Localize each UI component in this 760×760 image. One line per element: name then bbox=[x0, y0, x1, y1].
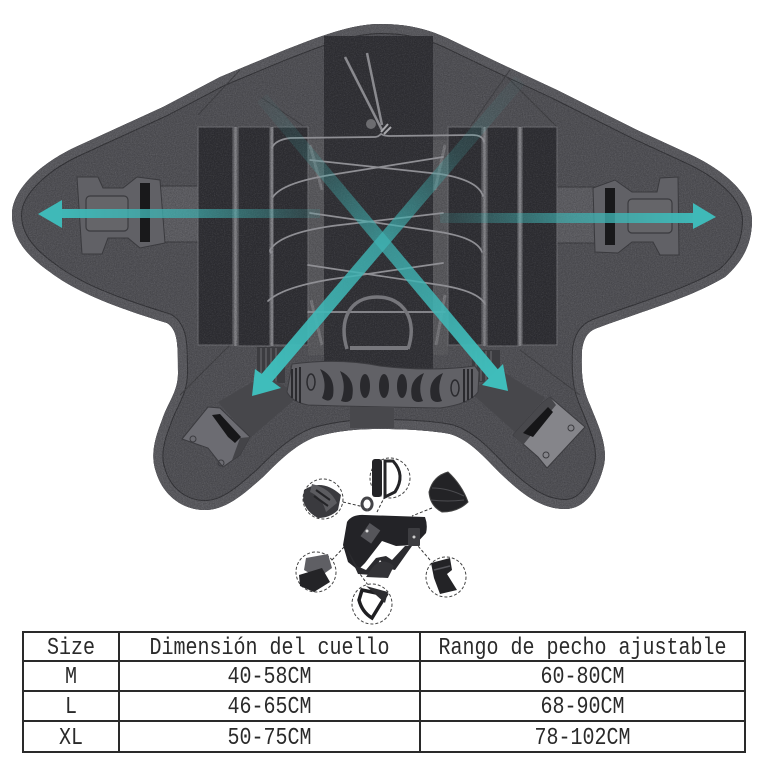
size table: Rango de pecho ajustable bbox=[438, 634, 727, 662]
inner lacing side strips bbox=[308, 140, 448, 355]
size table: 50-75CM bbox=[227, 724, 312, 752]
cord lock and loose cord ends bbox=[345, 53, 391, 134]
harness product photo bbox=[0, 0, 760, 520]
size table: 78-102CM bbox=[534, 724, 630, 752]
leader lines bbox=[332, 496, 432, 585]
D-ring bbox=[344, 297, 411, 349]
horizontal arrow to left bbox=[38, 200, 320, 228]
lower side webbing by handle bbox=[257, 347, 500, 383]
right side-release buckle bbox=[593, 177, 679, 255]
horizontal arrow to right bbox=[440, 203, 716, 229]
inset: metal buckle detail bbox=[296, 552, 336, 592]
size table: 40-58CM bbox=[227, 664, 312, 691]
size table: Size bbox=[47, 634, 95, 662]
inset: side-release buckle detail bbox=[426, 557, 466, 597]
diagonal arrow to lower left bbox=[252, 80, 520, 396]
size table: 46-65CM bbox=[227, 694, 312, 721]
velcro dividers bbox=[236, 127, 520, 346]
inset: D-ring detail bbox=[370, 458, 410, 498]
inset: lower D-ring detail bbox=[352, 584, 392, 624]
grab handle bbox=[287, 361, 479, 408]
diagonal arrow to lower right bbox=[262, 98, 508, 391]
inset: padded wing detail bbox=[429, 472, 468, 512]
size table: Dimensión del cuello bbox=[149, 634, 390, 662]
harness body bbox=[0, 0, 760, 520]
size table: 60-80CM bbox=[540, 664, 624, 691]
size table: XL bbox=[59, 724, 83, 752]
right lower metal buckle bbox=[513, 397, 585, 468]
size table: L bbox=[65, 694, 77, 721]
left side-release buckle bbox=[77, 177, 165, 254]
miniature harness bbox=[343, 498, 427, 578]
elastic lacing cord bbox=[268, 134, 485, 312]
accessory detail diagram bbox=[296, 458, 468, 624]
side webbing straps bbox=[160, 186, 596, 243]
velcro patches bbox=[198, 127, 557, 346]
diagonal strap to right buckle bbox=[470, 370, 545, 432]
size table: 68-90CM bbox=[540, 694, 624, 721]
texture overlay bbox=[0, 0, 760, 520]
central dark panel bbox=[324, 36, 433, 376]
size table bbox=[22, 631, 746, 753]
webbing under handle bbox=[350, 407, 394, 428]
diagonal strap to left buckle bbox=[218, 375, 300, 438]
size table: M bbox=[65, 664, 77, 691]
left lower metal buckle bbox=[182, 407, 250, 467]
inset: handle detail bbox=[303, 479, 343, 519]
